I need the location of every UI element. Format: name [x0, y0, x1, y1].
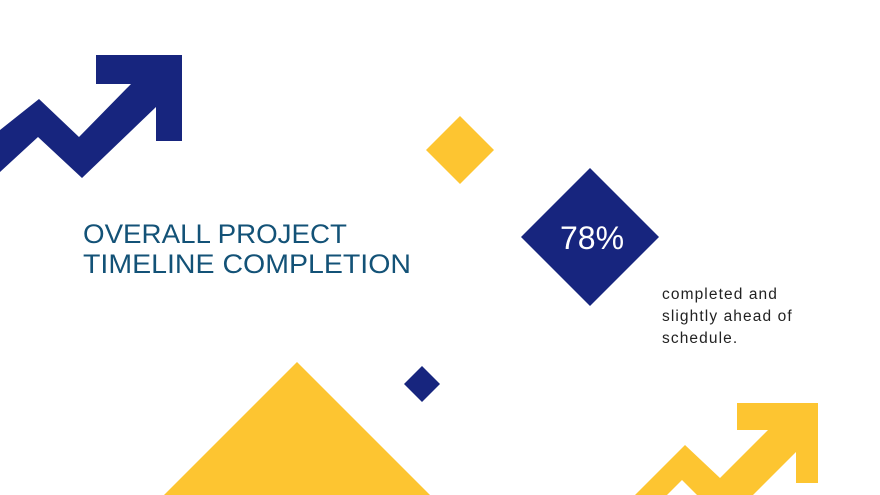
description text: schedule. — [662, 330, 738, 347]
icon: blue trend arrow — [0, 55, 182, 178]
icon: small yellow diamond — [426, 116, 494, 184]
description text: completed and — [662, 286, 778, 303]
title — [83, 219, 411, 279]
icon: yellow trend arrow — [635, 403, 818, 495]
title: TIMELINE COMPLETION — [83, 249, 411, 279]
icon: small blue diamond — [404, 366, 440, 402]
description text — [662, 286, 793, 347]
title: OVERALL PROJECT — [83, 219, 347, 249]
description text: slightly ahead of — [662, 308, 793, 325]
icon: yellow triangle — [164, 362, 430, 495]
stat diamond: 78% — [521, 168, 659, 306]
stat diamond: 78%: 78% — [560, 220, 624, 256]
